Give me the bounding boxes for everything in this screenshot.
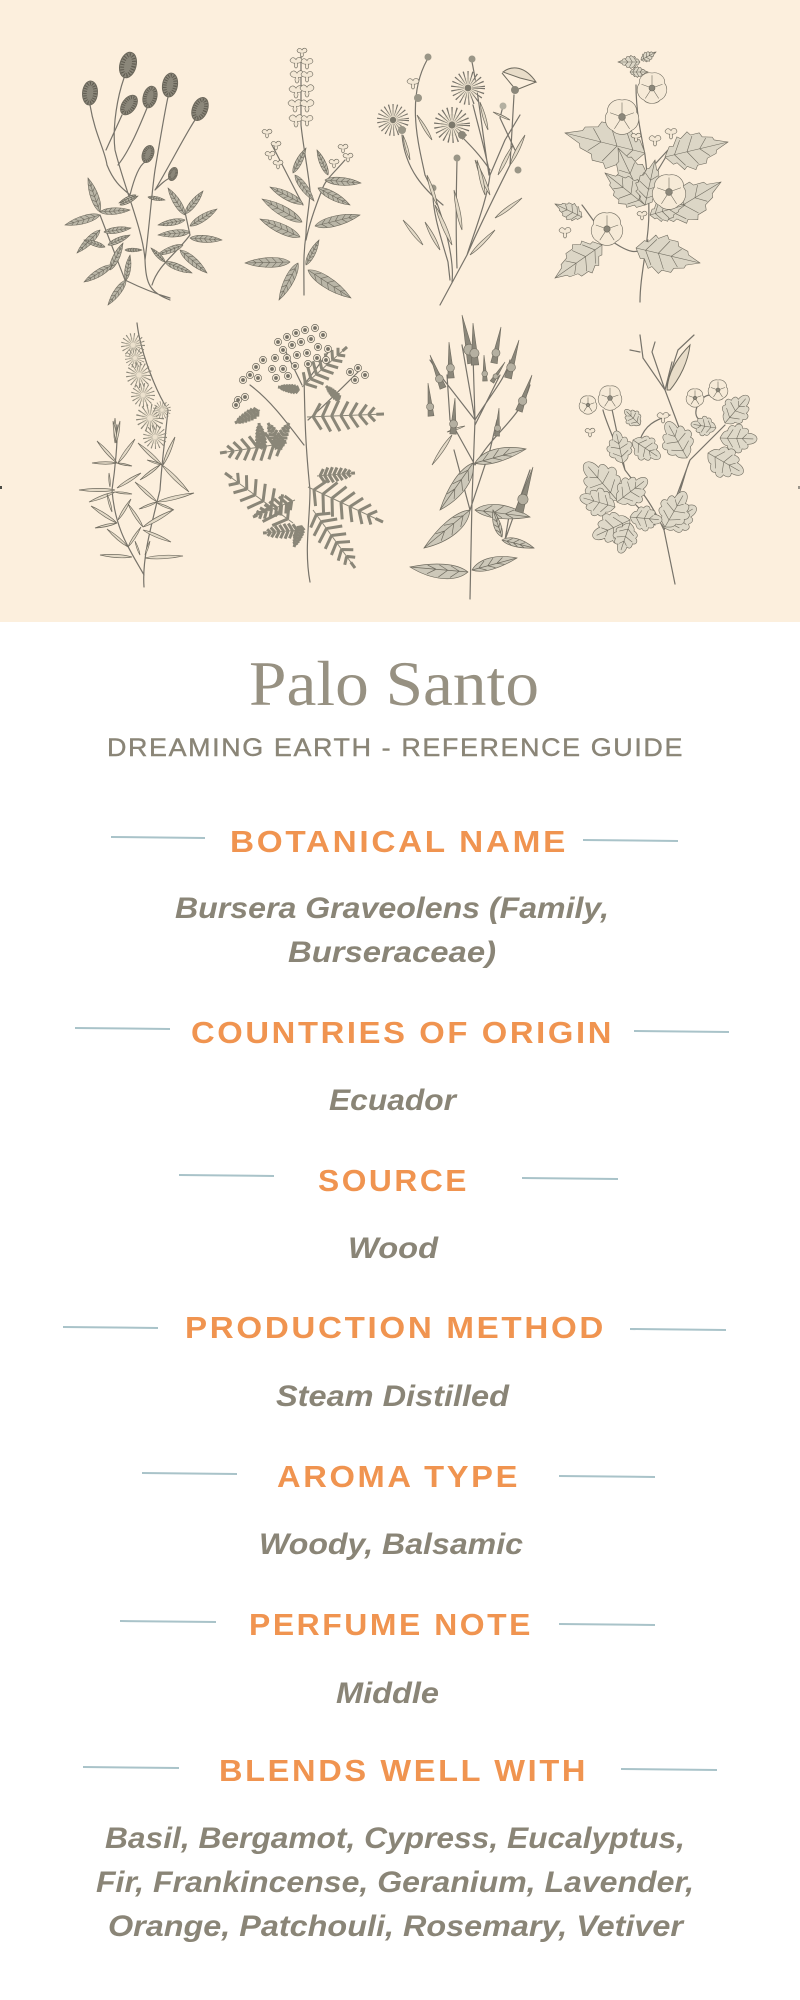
value: perfume note: Middle [336,1677,439,1710]
subtitle: DREAMING EARTH - REFERENCE GUIDE [107,734,684,762]
value: blends well with: Fir, Frankincense, Geranium, Lavender, [96,1866,694,1899]
value: blends well with: Basil, Bergamot, Cypress, Eucalyptus, [105,1822,685,1855]
value: countries of origin: Ecuador [329,1084,458,1117]
value: blends well with: Orange, Patchouli, Rosemary, Vetiver [108,1910,686,1943]
plant: narrow-leaved flowering herb [79,323,194,587]
plant: verbena with spikes [409,314,538,599]
value: botanical name: Bursera Graveolens (Family, [175,892,609,925]
heading: aroma type: AROMA TYPE [277,1459,520,1494]
section: aroma type [142,1459,655,1561]
section: production method [63,1310,726,1413]
plant: flowering sage [245,48,361,303]
value: production method: Steam Distilled [276,1380,510,1413]
value: botanical name: Burseraceae) [288,936,496,969]
section: source [179,1163,618,1265]
heading: source: SOURCE [318,1163,469,1198]
value: source: Wood [348,1232,439,1265]
plant: mallow with broad leaves [545,48,732,302]
value: botanical name [175,892,609,969]
value: aroma type: Woody, Balsamic [259,1528,523,1561]
plant: burnet with dark oval heads [64,50,222,307]
heading: production method: PRODUCTION METHOD [185,1310,606,1345]
value: blends well with [96,1822,694,1943]
section: perfume note [120,1607,655,1710]
section: botanical name [111,824,678,969]
section: countries of origin [75,1015,729,1117]
plant: tansy with fern-like fronds [215,324,390,582]
plant: cornflower [383,54,536,305]
title: Palo Santo [249,648,539,719]
heading: countries of origin: COUNTRIES OF ORIGIN [191,1015,614,1050]
botanical illustration panel [0,0,800,622]
plant: celandine with lobed leaves [571,335,759,584]
heading: blends well with: BLENDS WELL WITH [219,1753,588,1788]
heading: botanical name: BOTANICAL NAME [230,824,568,859]
heading: perfume note: PERFUME NOTE [249,1607,533,1642]
section: blends well with [83,1753,717,1943]
